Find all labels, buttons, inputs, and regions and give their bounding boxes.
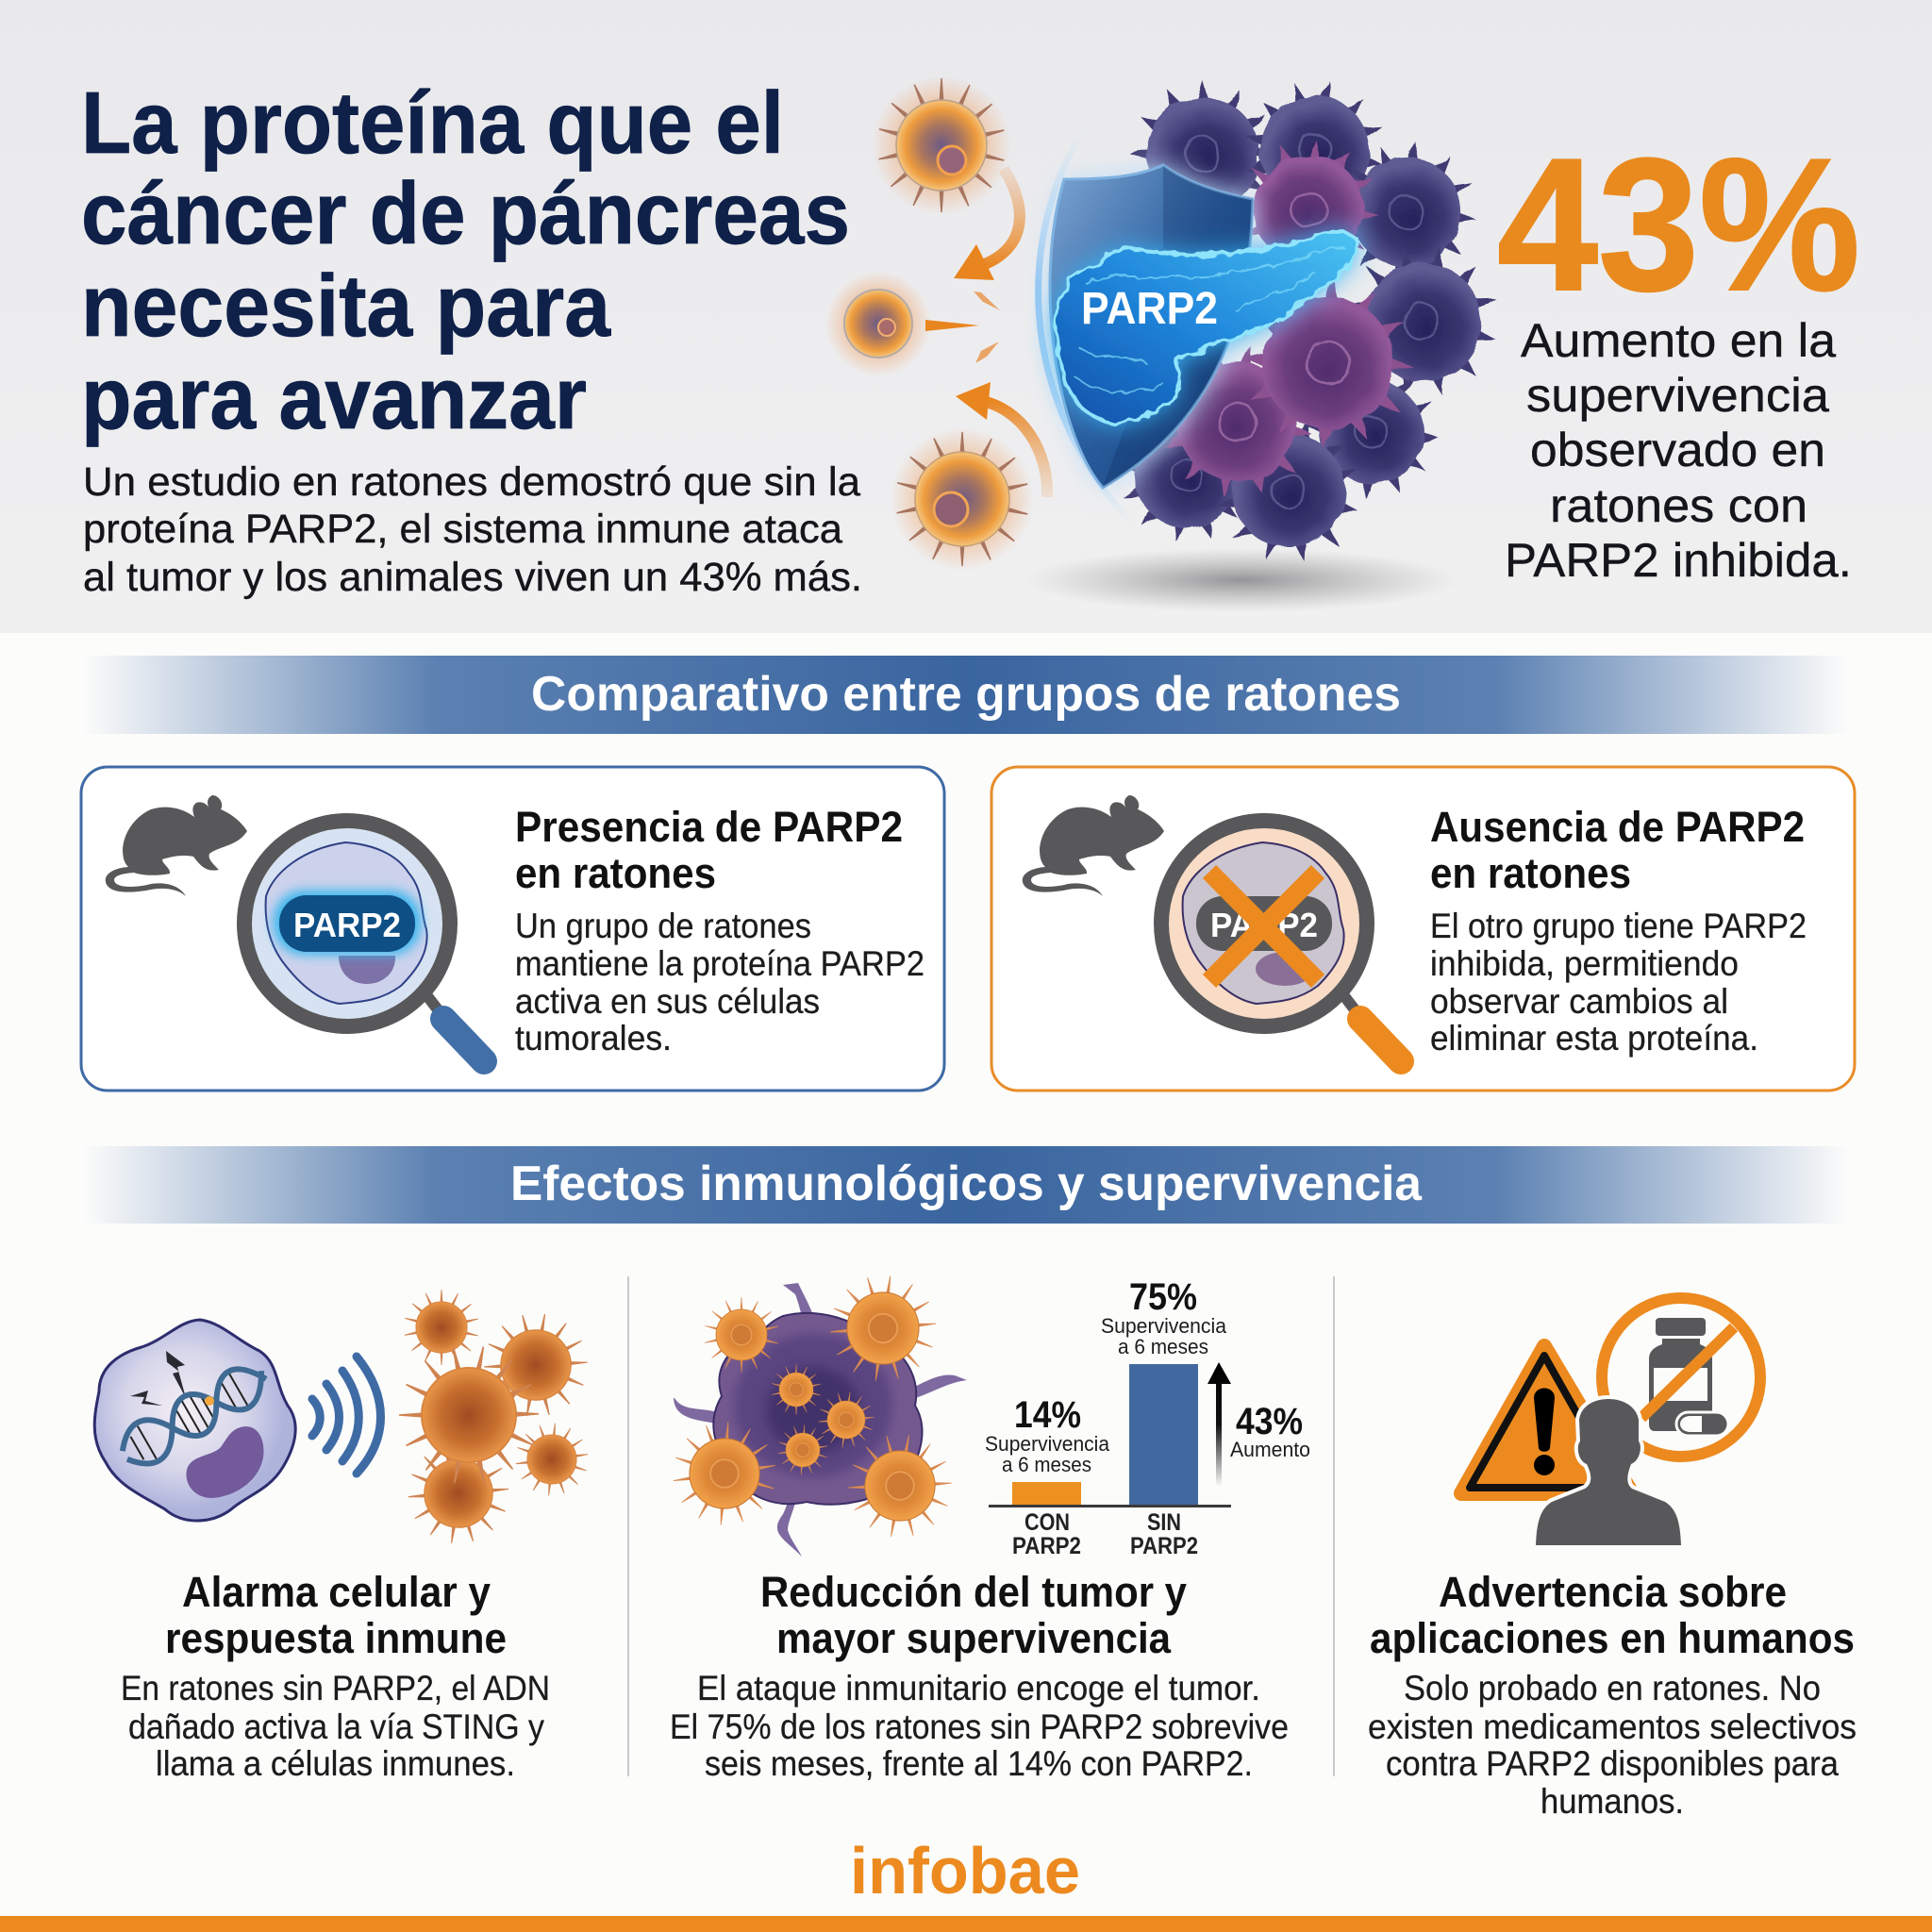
value: 43% increase: 43%: [1236, 1401, 1303, 1442]
section banner: comparison: Comparativo entre grupos de ratones: [531, 667, 1401, 722]
heading: Alarma celular y: [182, 1568, 491, 1616]
card text: activa en sus células: [515, 982, 820, 1021]
card text: eliminar esta proteína.: [1430, 1019, 1758, 1058]
body text: El 75% de los ratones sin PARP2 sobrevive: [670, 1707, 1289, 1746]
card title: [515, 803, 903, 897]
icon: magnifier with crossed cell: PARP2: [1210, 906, 1318, 944]
title: cáncer de páncreas: [81, 164, 850, 262]
body text: llama a células inmunes.: [156, 1744, 515, 1783]
icon: person silhouette: [1536, 1399, 1681, 1545]
card title: Presencia de PARP2: [515, 803, 903, 851]
logo: infobae: [850, 1834, 1080, 1907]
heading: mayor supervivencia: [776, 1614, 1172, 1662]
header panel: [0, 0, 1932, 633]
body text: [670, 1669, 1289, 1783]
value: 75%: Supervivencia: [1101, 1314, 1227, 1338]
arrow: deflected lower: [956, 382, 1047, 497]
arrow: deflected middle: [925, 291, 1000, 363]
icon: warning triangle: [1461, 1346, 1632, 1493]
card title: en ratones: [1430, 849, 1631, 897]
column: warning on human use: [1368, 1298, 1857, 1821]
icon: immune cells: [387, 1290, 594, 1550]
card text: observar cambios al: [1430, 982, 1728, 1021]
statistic description: supervivencia: [1526, 369, 1829, 422]
illustration: shield: [1039, 122, 1253, 525]
statistic description: PARP2 inhibida.: [1505, 534, 1852, 587]
heading: [165, 1568, 507, 1662]
divider left: [627, 1276, 629, 1776]
card text: inhibida, permitiendo: [1430, 944, 1739, 983]
heading: respuesta inmune: [165, 1614, 507, 1662]
card text: [1430, 907, 1807, 1058]
arrow: deflected upper: [954, 169, 1020, 280]
statistic description: Aumento en la: [1521, 314, 1836, 367]
illustration shadow: [1024, 548, 1458, 612]
column: cellular alarm: [94, 1290, 594, 1783]
subtitle text: Un estudio en ratones demostró que sin la: [83, 459, 860, 505]
subtitle text: proteína PARP2, el sistema inmune ataca: [83, 507, 842, 552]
heading: aplicaciones en humanos: [1370, 1614, 1855, 1662]
axis labels: PARP2: [1012, 1533, 1081, 1559]
icon: tumor attacked by immune cells: [670, 1269, 967, 1557]
card text: Un grupo de ratones: [515, 907, 811, 945]
card text: El otro grupo tiene PARP2: [1430, 907, 1807, 945]
card text: [515, 907, 924, 1058]
icon: magnifier with crossed cell: [1161, 821, 1401, 1061]
illustration: glowing pancreas: [1056, 232, 1357, 425]
axis labels: CON: [1024, 1509, 1070, 1536]
heading: [1370, 1568, 1855, 1662]
column: tumor reduction: [670, 1269, 1310, 1783]
body text: existen medicamentos selectivos: [1368, 1707, 1857, 1746]
value: 43% increase: Aumento: [1230, 1438, 1310, 1461]
card text: mantiene la proteína PARP2: [515, 944, 924, 983]
card title: Ausencia de PARP2: [1430, 803, 1805, 851]
title: para avanzar: [81, 349, 587, 447]
subtitle text: al tumor y los animales viven un 43% más.: [83, 555, 862, 600]
icon: prohibited medication: [1602, 1298, 1760, 1457]
bar: without PARP2: [1129, 1364, 1198, 1506]
icon: magnifier with active cell: [244, 821, 484, 1061]
icon: mouse: [1023, 795, 1164, 896]
icon: magnifier with active cell: PARP2: [293, 906, 401, 944]
big statistic: 43%: [1497, 120, 1860, 330]
body text: [121, 1669, 550, 1783]
divider right: [1333, 1276, 1335, 1776]
value: 75%: [1101, 1276, 1227, 1358]
illustration: immune cell top: [872, 75, 1011, 215]
body text: contra PARP2 disponibles para: [1386, 1744, 1839, 1783]
section banner: comparison: [82, 656, 1849, 734]
panel: absence of PARP2: [991, 767, 1855, 1091]
body text: Solo probado en ratones. No: [1404, 1669, 1821, 1707]
heading: Reducción del tumor y: [760, 1568, 1187, 1616]
axis labels: [1012, 1509, 1198, 1559]
body text: dañado activa la vía STING y: [128, 1707, 544, 1746]
body text: En ratones sin PARP2, el ADN: [121, 1669, 550, 1707]
title: La proteína que el: [81, 74, 784, 172]
value: 14%: 14%: [1014, 1394, 1081, 1436]
bar chart: [985, 1276, 1310, 1559]
panel: presence of PARP2: [81, 767, 944, 1091]
axis labels: PARP2: [1130, 1533, 1198, 1559]
statistic description: [1505, 314, 1852, 587]
title: [81, 74, 850, 447]
heading: [760, 1568, 1187, 1662]
illustration: immune cell bottom: [891, 427, 1034, 571]
value: 75%: a 6 meses: [1118, 1335, 1208, 1358]
card title: en ratones: [515, 849, 716, 897]
icon: signal waves: [312, 1357, 381, 1474]
body text: [1368, 1669, 1857, 1821]
statistic description: observado en: [1530, 424, 1825, 476]
card text: tumorales.: [515, 1019, 672, 1058]
icon: mouse: [106, 795, 247, 896]
arrow: increase: [1208, 1362, 1231, 1487]
value: 14%: [985, 1394, 1110, 1476]
body text: humanos.: [1541, 1782, 1684, 1821]
body text: seis meses, frente al 14% con PARP2.: [705, 1744, 1253, 1783]
statistic description: ratones con: [1550, 479, 1807, 532]
body text: El ataque inmunitario encoge el tumor.: [697, 1669, 1260, 1707]
value: 14%: Supervivencia: [985, 1432, 1110, 1456]
card title: [1430, 803, 1805, 897]
pancreas label: PARP2: [1081, 284, 1218, 334]
section banner: effects: Efectos inmunológicos y supervivencia: [510, 1157, 1423, 1211]
subtitle text: [83, 459, 862, 600]
section banner: effects: [82, 1146, 1849, 1224]
axis labels: SIN: [1147, 1509, 1181, 1536]
title: necesita para: [81, 257, 611, 355]
bar: with PARP2: [1012, 1482, 1081, 1506]
value: 14%: a 6 meses: [1002, 1453, 1091, 1476]
illustration: immune cell middle: [825, 271, 931, 376]
heading: Advertencia sobre: [1439, 1568, 1787, 1616]
icon: cell with damaged DNA: [94, 1320, 295, 1521]
footer bar: [0, 1916, 1932, 1932]
value: 43% increase: [1230, 1401, 1310, 1461]
illustration: tumor cell cluster: [1109, 67, 1515, 582]
value: 75%: 75%: [1129, 1276, 1197, 1318]
